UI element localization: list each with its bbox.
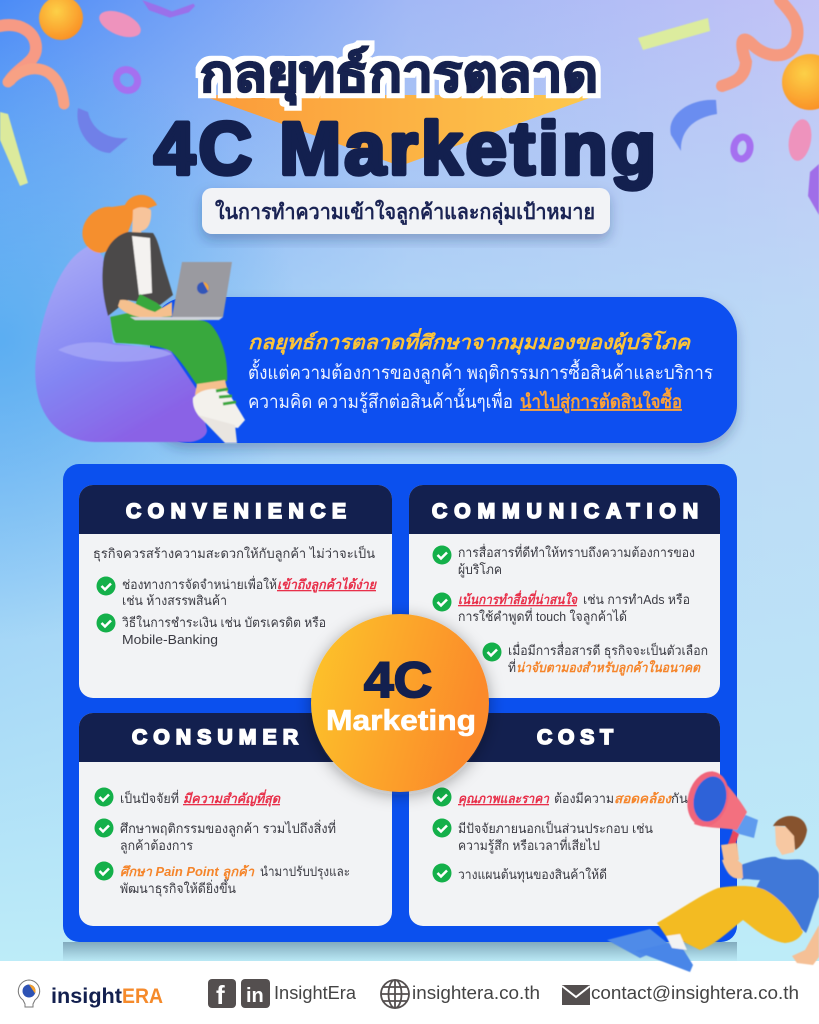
confetti: left <box>0 0 194 186</box>
center circle badge <box>311 614 489 792</box>
shadow under 4C panel <box>63 942 737 962</box>
badge 4C: 4C <box>364 652 432 708</box>
check item 2: มีปัจจัยภายนอกเป็นส่วนประกอบ เช่น <box>458 819 653 836</box>
card: cost <box>409 713 720 926</box>
trousers <box>110 294 227 385</box>
check item 1: เป็นปัจจัยที่ <box>120 789 179 806</box>
panel highlight: นำไปสู่การตัดสินใจซื้อ <box>520 387 682 414</box>
heading: Thai: กลยุทธ์การตลาด <box>200 46 598 105</box>
check item 3 <box>94 862 350 897</box>
mail icon <box>562 985 590 1005</box>
orange triangle behind title <box>201 95 598 166</box>
check item 1 <box>96 576 377 608</box>
badge Marketing: Marketing <box>326 705 476 737</box>
shirt <box>132 236 152 295</box>
globe icon <box>381 980 409 1008</box>
check item 3: พัฒนาธุรกิจให้ดียิ่งขึ้น <box>120 879 236 897</box>
check item 2: ศึกษาพฤติกรรมของลูกค้า รวมไปถึงสิ่งที่ <box>120 820 336 837</box>
footer <box>0 961 819 1024</box>
check item 1: การสื่อสารที่ดีทำให้ทราบถึงความต้องการของ <box>458 544 695 560</box>
panel text line 1: ตั้งแต่ความต้องการของลูกค้า พฤติกรรมการซื้อสินค้าและบริการ <box>248 359 713 384</box>
facebook icon <box>208 979 236 1010</box>
illustration: woman on beanbag <box>35 195 245 443</box>
beanbag highlight <box>58 342 172 362</box>
forearm <box>118 300 172 318</box>
check item 2 <box>96 614 326 647</box>
check item 1: กัน <box>671 791 688 806</box>
check item 3 <box>432 864 607 883</box>
facebook icon: f <box>216 980 225 1010</box>
megaphone <box>681 767 758 856</box>
title <box>154 46 656 190</box>
check item 1: คุณภาพและราคา <box>458 791 550 807</box>
check item 2: เน้นการทำสื่อที่น่าสนใจ <box>458 590 578 607</box>
website: insightera.co.th <box>412 983 540 1003</box>
check item 2: เช่น การทำAds หรือ <box>583 592 690 607</box>
logo <box>18 980 163 1008</box>
panel: definition <box>150 297 737 443</box>
social name: InsightEra <box>274 983 357 1003</box>
intro text: ธุรกิจควรสร้างความสะดวกให้กับลูกค้า ไม่ว่าจะเป็น <box>93 544 375 562</box>
heading: COMMUNICATION <box>432 500 698 523</box>
card: consumer <box>79 713 392 926</box>
beanbag <box>35 245 207 442</box>
ankle and shoes <box>195 380 228 395</box>
check item 2 <box>432 590 690 625</box>
check item 3: นำมาปรับปรุงและ <box>260 864 350 880</box>
check item 1: ผู้บริโภค <box>458 562 502 578</box>
illustration: man with megaphone <box>607 767 819 972</box>
logo: insight <box>51 985 122 1008</box>
hair <box>82 195 157 253</box>
check item 3 <box>482 641 708 676</box>
check item 1 <box>94 788 282 807</box>
linkedin icon <box>241 979 270 1008</box>
check item 2 <box>432 818 653 854</box>
confetti: right <box>638 0 819 215</box>
check item 1: เช่น ห้างสรรพสินค้า <box>122 593 227 608</box>
heading: COST <box>537 726 613 749</box>
heading: CONSUMER <box>132 726 298 749</box>
man body <box>607 816 819 972</box>
check item 2: การใช้คำพูดที่ touch ใจลูกค้าได้ <box>458 608 627 625</box>
check item 1: ช่องทางการจัดจำหน่ายเพื่อให้ <box>122 576 277 592</box>
check item 1: ต้องมีความ <box>554 791 614 806</box>
panel heading: กลยุทธ์การตลาดที่ศึกษาจากมุมมองของผู้บริโภค <box>248 328 692 355</box>
heading: 4C Marketing: 4C Marketing <box>154 107 656 190</box>
check item 1: มีความสำคัญที่สุด <box>183 789 282 807</box>
check item 2: Mobile-Banking <box>122 632 218 647</box>
linkedin icon: in <box>246 985 264 1007</box>
check item 2: ลูกค้าต้องการ <box>120 838 193 854</box>
check item 1 <box>432 788 688 807</box>
heading: CONVENIENCE <box>126 500 346 523</box>
check item 1 <box>432 544 695 578</box>
subtitle pill <box>202 188 610 234</box>
check item 2: ความรู้สึก หรือเวลาที่เสียไป <box>458 837 600 854</box>
check item 3: น่าจับตามองสำหรับลูกค้าในอนาคต <box>516 660 701 676</box>
card: communication <box>409 485 720 698</box>
email: contact@insightera.co.th <box>591 983 799 1003</box>
check item 3: วางแผนต้นทุนของสินค้าให้ดี <box>458 867 607 883</box>
face <box>132 207 151 238</box>
check item 3: เมื่อมีการสื่อสารดี ธุรกิจจะเป็นตัวเลือก <box>508 641 708 659</box>
check item 2: วิธีในการชำระเงิน เช่น บัตรเครดิต หรือ <box>121 615 326 630</box>
panel: 4C container <box>63 464 737 942</box>
check item 1: สอดคล้อง <box>614 791 673 806</box>
check item 3: ที่ <box>508 659 516 675</box>
check item 2 <box>94 818 336 854</box>
check item 3: ศึกษา Pain Point ลูกค้า <box>120 864 255 880</box>
logo: ERA <box>122 985 163 1008</box>
jacket <box>102 232 173 316</box>
laptop <box>172 262 232 317</box>
card: convenience <box>79 485 392 698</box>
panel text line 2: ความคิด ความรู้สึกต่อสินค้านั้นๆเพื่อ <box>248 388 513 413</box>
subtitle pill: ในการทำความเข้าใจลูกค้าและกลุ่มเป้าหมาย <box>215 199 595 226</box>
check item 1: เข้าถึงลูกค้าได้ง่าย <box>277 577 377 593</box>
